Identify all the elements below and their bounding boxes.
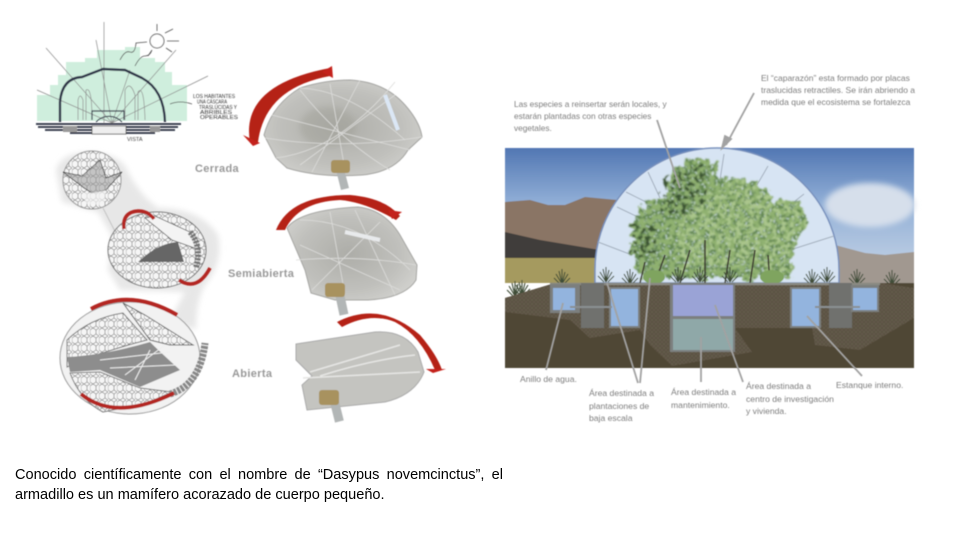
sketch annotation: ABRIBLES [200,110,233,116]
label: water ring: Anillo de agua. [520,374,577,384]
sketch: dome section with sun [36,22,239,143]
armadillo: half open [108,211,210,288]
label: species: estarán plantadas con otras especies [514,111,651,121]
state labels [195,163,295,380]
underground structure [550,283,880,352]
caption text: Conocido científicamente con el nombre de “Dasypus novemcinctus”, el armadillo es un mamífero acorazado de cuerpo pequeño. [15,467,503,503]
state labels: Abierta [232,368,273,380]
annotation texts [514,73,915,423]
sketch annotation [193,94,239,121]
trees [632,158,808,278]
armadillo illustrations [56,151,219,414]
sky [505,148,914,283]
label: shell plates: El “caparazón” esta formado por placas [761,73,910,83]
label: species: Las especies a reinsertar serán locales, y [514,99,667,109]
label: shell plates: medida que el ecosistema se fortalezca [761,97,911,107]
label: small-scale plantations: baja escala [589,413,633,423]
label: maintenance: mantenimiento. [671,400,730,410]
label: internal pond: Estanque interno. [836,380,903,390]
sketch annotation: UNA CÁSCARA [197,98,228,106]
ground [505,283,914,368]
mountains [505,197,617,283]
label: shell plates: traslucidas retractiles. Se irán abriendo a [761,85,915,95]
label: maintenance: Área destinada a [671,387,736,397]
arrow: rotation [249,68,330,142]
sketch annotation: TRASLÚCIDAS Y [199,104,238,111]
label: species: vegetales. [514,123,552,133]
label: research centre: y vivienda. [746,406,787,416]
label: small-scale plantations: plantaciones de [589,401,649,411]
state labels: Cerrada [195,163,240,175]
label: small-scale plantations: Área destinada a [589,388,654,398]
armadillo: closed [63,151,122,245]
sketch annotation: LOS HABITANTES [193,94,236,100]
state labels: Semiabierta [228,268,295,280]
label: research centre: Área destinada a [746,381,811,391]
panel: habitat section [505,148,915,368]
label: research centre: centro de investigación [746,394,834,404]
sketch: dome section with sun: VISTA [127,137,143,143]
callout arrows [546,93,862,383]
armadillo: open [60,300,205,414]
model: closed [243,66,422,190]
model: half open [276,195,417,316]
model: open [296,314,446,423]
shrubs and grasses [507,267,900,296]
arrow: rotation [276,195,400,230]
dome interior [595,148,839,283]
arrow: rotation [337,314,442,370]
sketch annotation: OPERABLES [200,115,239,121]
